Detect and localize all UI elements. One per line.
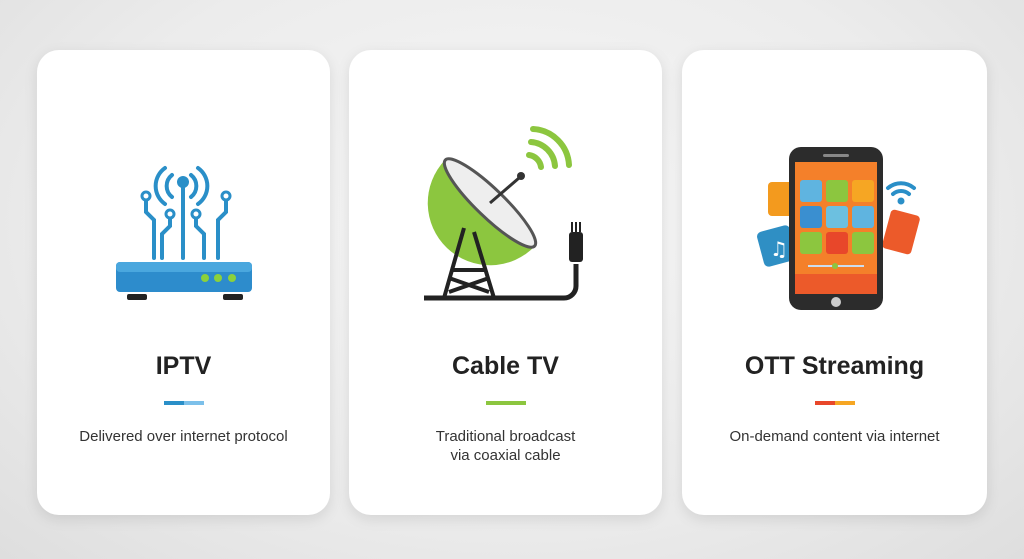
text: OTT description: On-demand content via internet xyxy=(729,428,940,445)
icon: smartphone with apps: ♫ xyxy=(770,237,788,261)
text: IPTV description: Delivered over internet protocol xyxy=(79,428,288,445)
icon: satellite dish xyxy=(424,126,583,300)
accent bar xyxy=(486,401,526,405)
panel: Cable TV xyxy=(349,50,662,515)
icon: router xyxy=(116,166,252,300)
accent bar xyxy=(815,401,855,405)
panel: IPTV xyxy=(37,50,330,515)
heading: Cable TV: Cable TV xyxy=(452,352,559,380)
icon: smartphone with apps xyxy=(757,147,920,310)
accent bar xyxy=(164,401,204,405)
panel: OTT Streaming xyxy=(682,50,987,515)
heading: IPTV: IPTV xyxy=(156,352,211,380)
text: Cable TV description: via coaxial cable xyxy=(450,447,561,464)
heading: OTT Streaming: OTT Streaming xyxy=(745,352,924,380)
text: Cable TV description: Traditional broadcast xyxy=(436,428,575,445)
text: Cable TV description xyxy=(436,428,576,464)
